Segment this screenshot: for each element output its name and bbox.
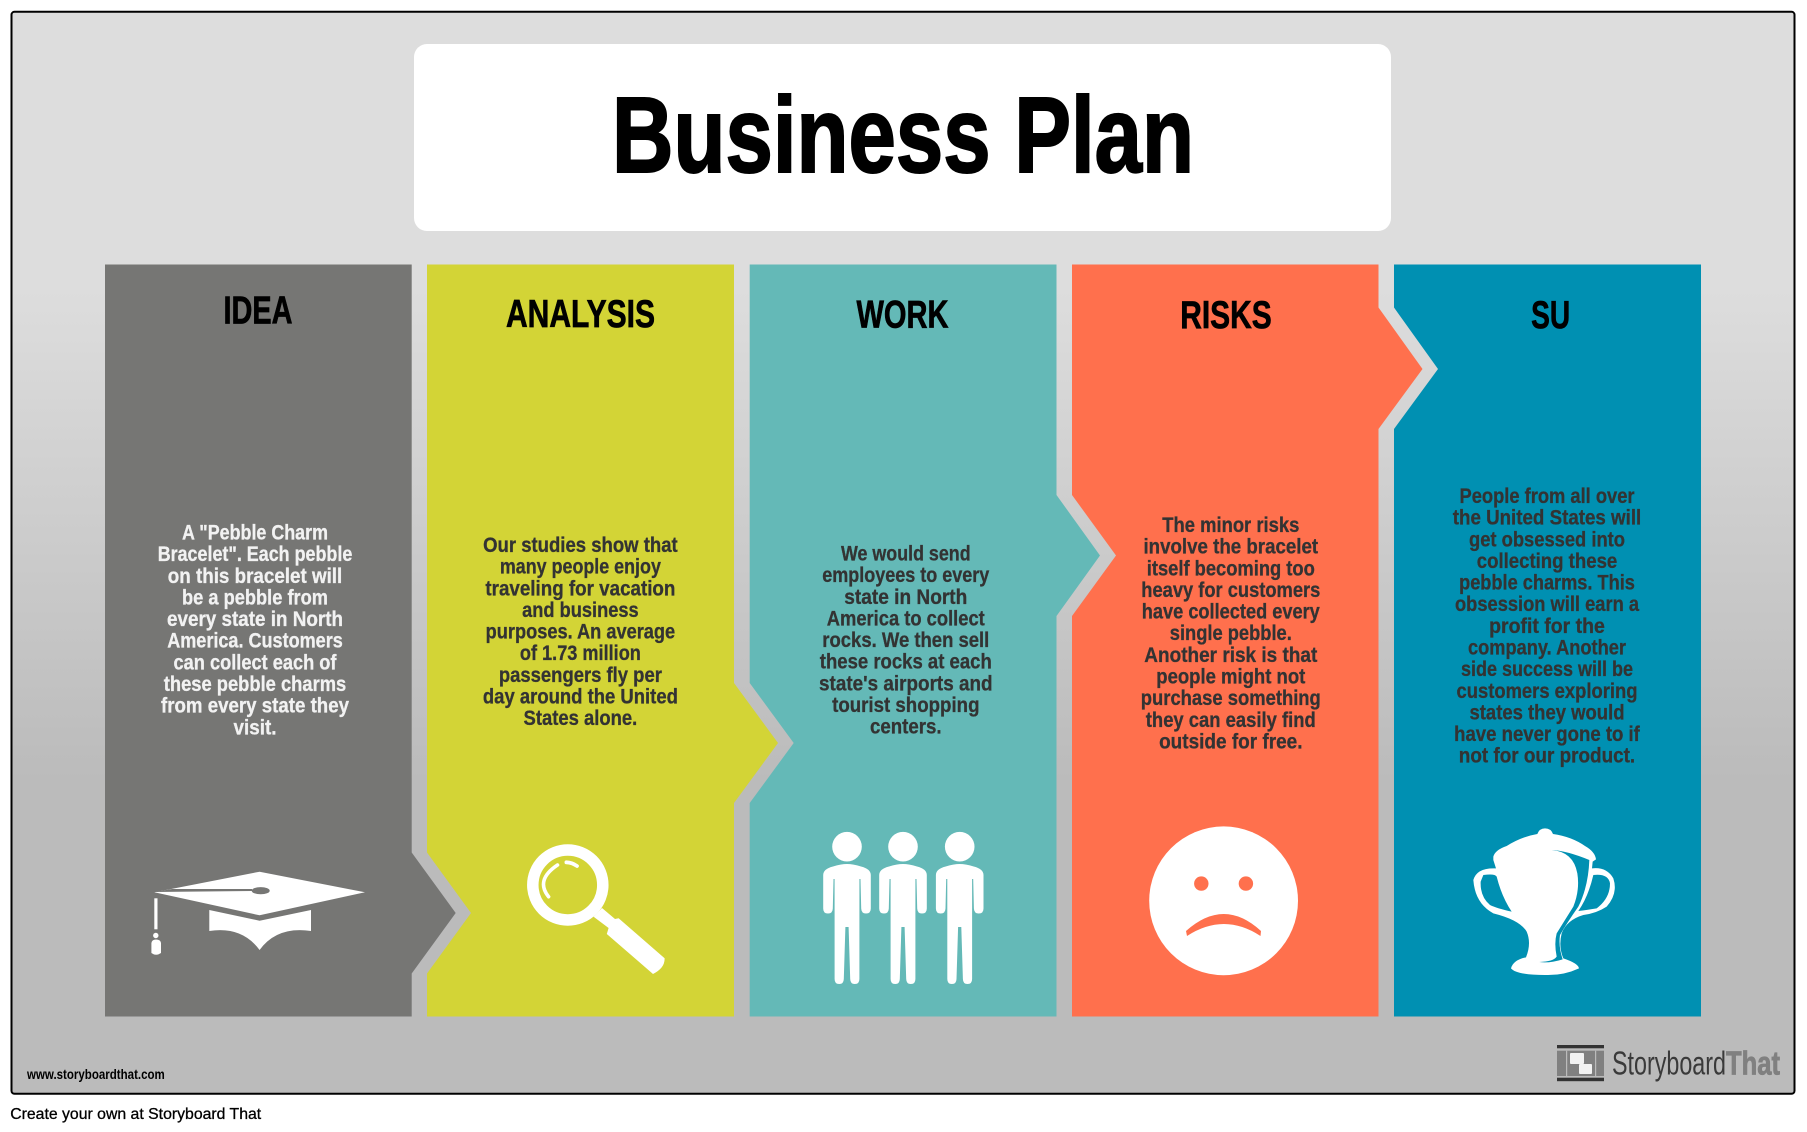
heading: idea: IDEA (224, 290, 292, 332)
text: risks: outside for free. (1159, 729, 1303, 753)
text: risks: purchase something (1141, 686, 1321, 710)
text: success: collecting these (1477, 549, 1617, 573)
text: success: obsession will earn a (1455, 592, 1640, 616)
title: Business Plan (612, 74, 1194, 195)
text: risks: have collected every (1142, 600, 1320, 624)
text: idea: be a pebble from (182, 585, 328, 609)
text: risks: single pebble. (1170, 621, 1292, 645)
text: analysis: traveling for vacation (485, 576, 675, 600)
title box (414, 44, 1391, 231)
heading: analysis: ANALYSIS (506, 293, 655, 336)
text: risks: itself becoming too (1147, 556, 1315, 580)
text: work: centers. (870, 715, 942, 739)
heading: work: WORK (856, 294, 948, 336)
icon: graduation cap (151, 872, 365, 955)
text: idea: these pebble charms (164, 672, 346, 696)
text: idea: America. Customers (167, 629, 343, 653)
text: idea (158, 520, 352, 739)
text: analysis: purposes. An average (486, 620, 675, 644)
text: success: states they would (1470, 700, 1624, 724)
panel: success (1394, 264, 1701, 1016)
text: risks: heavy for customers (1141, 578, 1320, 602)
text: success (1453, 484, 1641, 768)
text: idea: can collect each of (174, 650, 337, 674)
text: analysis: States alone. (524, 706, 637, 730)
text: analysis: day around the United (483, 684, 678, 708)
text: analysis: of 1.73 million (520, 641, 641, 665)
text: work: state's airports and (819, 671, 993, 695)
footer caption: Create your own at Storyboard That (10, 1106, 262, 1123)
text: analysis (483, 533, 678, 730)
text: success: customers exploring (1456, 679, 1638, 703)
text: idea: Bracelet". Each pebble (158, 542, 352, 566)
text: risks (1141, 513, 1321, 753)
icon: three people (823, 832, 984, 984)
website url: www.storyboardthat.com (26, 1067, 165, 1082)
panel: risks (1072, 264, 1422, 1016)
text: work (819, 542, 993, 739)
logo: storyboard that: That (1726, 1044, 1780, 1081)
text: risks: people might not (1156, 664, 1305, 688)
text: risks: involve the bracelet (1143, 535, 1318, 559)
text: analysis: passengers fly per (499, 663, 662, 687)
text: risks: The minor risks (1162, 513, 1299, 537)
heading: su: SU (1531, 294, 1570, 337)
panel: work (750, 264, 1100, 1016)
icon: magnifying glass (533, 850, 665, 974)
text: success: side success will be (1461, 657, 1633, 681)
icon: sad face (1149, 826, 1298, 975)
logo text: Storyboard (1612, 1044, 1726, 1081)
text: success: get obsessed into (1469, 527, 1625, 551)
text: idea: on this bracelet will (168, 564, 342, 588)
text: success: have never gone to if (1454, 722, 1641, 746)
panel: analysis (427, 264, 778, 1016)
text: risks: Another risk is that (1144, 643, 1317, 667)
text: risks: they can easily find (1146, 708, 1316, 732)
text: analysis: Our studies show that (483, 533, 678, 557)
text: work: America to collect (827, 606, 985, 630)
text: work: these rocks at each (820, 650, 992, 674)
logo: storyboard that (1557, 1044, 1780, 1081)
text: success: the United States will (1453, 506, 1641, 530)
text: success: not for our product. (1459, 744, 1635, 768)
text: work: state in North (844, 585, 967, 609)
text: idea: every state in North (167, 607, 343, 631)
icon: trophy (1473, 828, 1615, 975)
text: analysis: and business (522, 598, 639, 622)
text: success: company. Another (1468, 636, 1627, 660)
text: work: employees to every (822, 563, 989, 587)
text: success: profit for the (1489, 614, 1605, 638)
panel: idea (105, 264, 456, 1016)
text: idea: A "Pebble Charm (182, 520, 328, 544)
text: analysis: many people enjoy (500, 555, 661, 579)
text: idea: from every state they (161, 694, 349, 718)
text: work: tourist shopping (832, 693, 980, 717)
logo icon (1557, 1045, 1604, 1081)
text: work: rocks. We then sell (822, 628, 989, 652)
text: idea: visit. (234, 715, 276, 739)
text: success: pebble charms. This (1459, 570, 1635, 594)
text: success: People from all over (1460, 484, 1635, 508)
text: work: We would send (841, 542, 971, 566)
heading: risks: RISKS (1180, 294, 1272, 337)
